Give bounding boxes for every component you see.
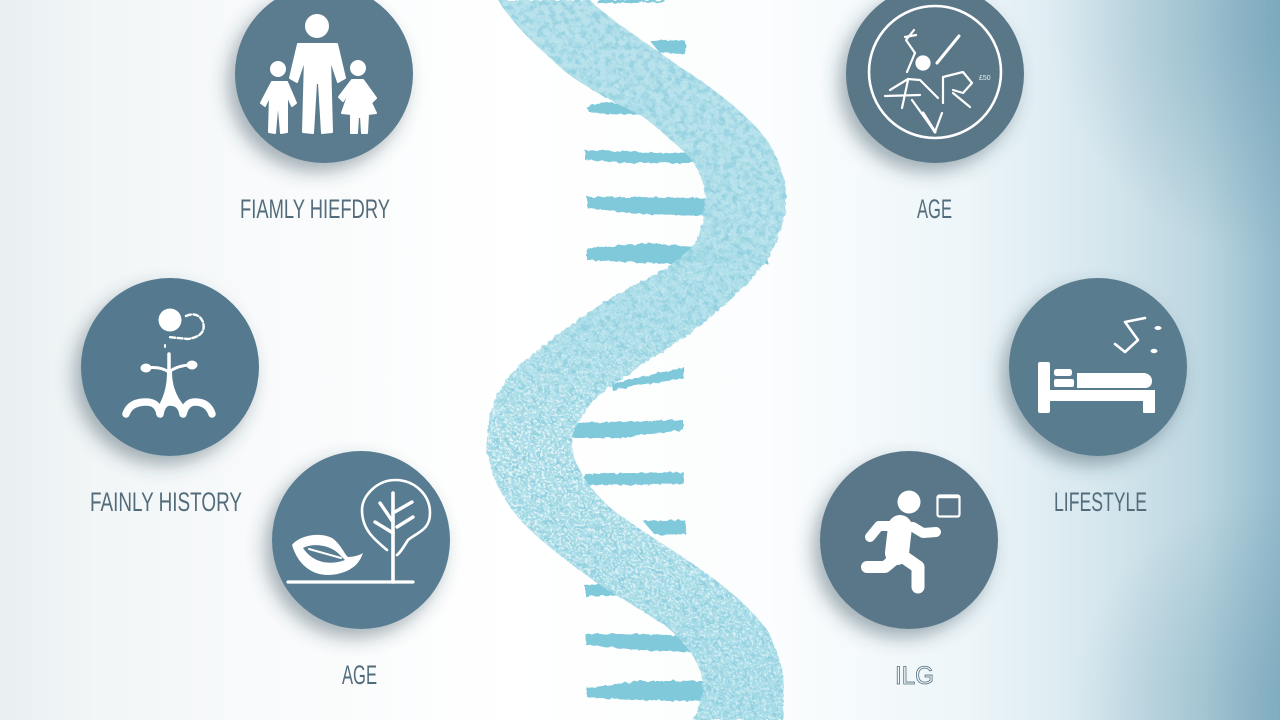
icon: bed with sleep marks [1038, 318, 1162, 413]
panel: family icon, top left [235, 0, 413, 163]
DNA ribbon speckle [487, 0, 786, 720]
icon: family of three [261, 15, 376, 133]
panel: hereditary icon, middle left [81, 278, 259, 456]
DNA ribbon [487, 0, 786, 720]
panel: exercise icon, bottom right [820, 451, 998, 629]
panel: sleep icon, middle right [1009, 278, 1187, 456]
panel: nature icon, bottom left [272, 451, 450, 629]
icon: ring with sketched figures [869, 6, 1001, 138]
panel: age icon, top right [846, 0, 1024, 163]
DNA helix [487, 0, 786, 720]
label: top left: FIAMLY HIEFDRY [240, 194, 390, 224]
icon: running figure with small screen [867, 490, 960, 587]
label: bottom right: ILG [895, 662, 934, 690]
DNA ribbon shading [487, 0, 786, 720]
DNA rungs [572, 0, 767, 701]
small icon annotation: £50 [979, 75, 991, 82]
label: top right: AGE [917, 194, 952, 224]
label: middle right: LIFESTYLE [1054, 487, 1147, 517]
label: middle left: FAINLY HISTORY [90, 487, 242, 517]
label: bottom left: AGE [342, 660, 377, 690]
icon: branching figure with thought cloud [126, 308, 212, 414]
icon: leaf and tree [288, 480, 430, 582]
